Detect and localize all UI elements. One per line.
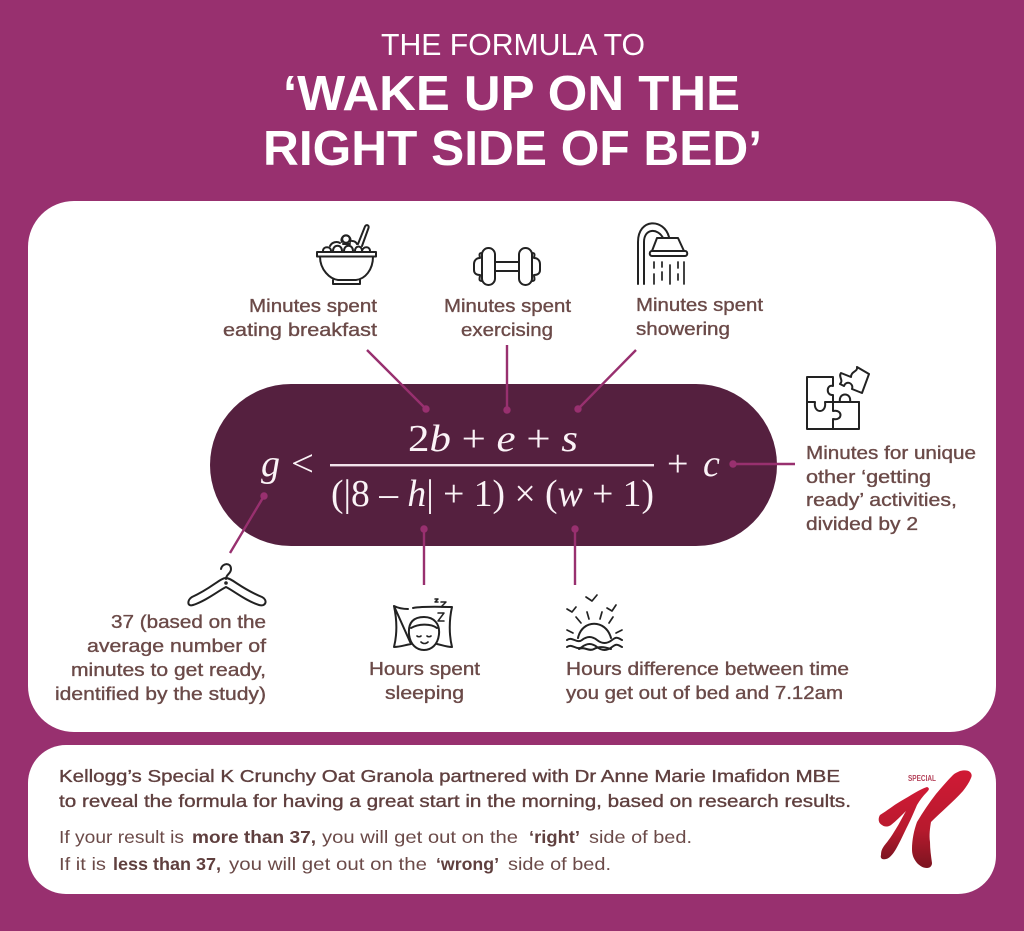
formula equation: c <box>703 443 720 485</box>
result text: side of bed. <box>589 827 692 847</box>
label: sleeping: sleeping <box>385 683 464 703</box>
label: other activities: ready’ activities, <box>806 490 957 510</box>
label: time difference <box>566 659 849 703</box>
label: other activities: Minutes for unique <box>806 443 976 463</box>
logo: Special K <box>879 770 972 868</box>
result text: less than 37, <box>113 854 221 874</box>
label: showering: showering <box>636 319 730 339</box>
panel: formula <box>28 201 996 732</box>
label: showering <box>636 295 763 339</box>
label: other activities: other ‘getting <box>806 467 931 487</box>
label: other activities: divided by 2 <box>806 514 918 534</box>
label: getting ready average: average number of <box>87 636 267 656</box>
label: getting ready average: 37 (based on the <box>111 612 266 632</box>
formula equation: + <box>667 443 688 485</box>
result text: ‘wrong’ <box>436 854 499 874</box>
label: breakfast: eating breakfast <box>223 320 377 340</box>
result text: ‘right’ <box>529 827 580 847</box>
logo: Special K: SPECIAL <box>908 774 936 783</box>
formula equation <box>261 418 720 515</box>
label: getting ready average: identified by the study) <box>55 684 266 704</box>
label: sleeping <box>369 659 480 703</box>
label: time difference: you get out of bed and 7.12am <box>566 683 843 703</box>
intro text: to reveal the formula for having a great start in the morning, based on research results. <box>59 791 851 811</box>
label: getting ready average: minutes to get ready, <box>71 660 266 680</box>
result text: you will get out on the <box>229 854 427 874</box>
result text <box>59 827 692 874</box>
icon: dumbbell <box>474 248 540 285</box>
label: other activities <box>806 443 976 534</box>
result text: more than 37, <box>192 827 316 847</box>
formula equation: 2b + e + s <box>408 418 578 460</box>
icon: sleeping face <box>394 599 452 650</box>
label: exercising: Minutes spent <box>444 296 571 316</box>
icon: cereal bowl <box>317 225 376 284</box>
label: sleeping: Hours spent <box>369 659 480 679</box>
result text: side of bed. <box>508 854 611 874</box>
icon: coat hanger <box>188 564 266 605</box>
formula equation: (|8 – h| + 1) × (w + 1) <box>331 473 654 515</box>
formula equation: g <box>261 443 280 485</box>
title <box>263 27 762 176</box>
label: breakfast: Minutes spent <box>249 296 377 316</box>
formula pill <box>210 384 777 546</box>
formula equation: < <box>291 443 314 485</box>
label: breakfast <box>223 296 377 340</box>
label: exercising <box>444 296 571 340</box>
intro text: Kellogg’s Special K Crunchy Oat Granola partnered with Dr Anne Marie Imafidon MBE <box>59 766 840 786</box>
title: ‘WAKE UP ON THE <box>283 67 740 121</box>
result text: you will get out on the <box>322 827 518 847</box>
result text: If your result is <box>59 827 184 847</box>
label: showering: Minutes spent <box>636 295 763 315</box>
intro text <box>59 766 851 811</box>
connector lines <box>230 345 795 585</box>
icon: sunrise <box>567 595 622 650</box>
icon: shower <box>638 223 687 284</box>
title: THE FORMULA TO <box>381 27 645 62</box>
icon: puzzle <box>807 367 869 429</box>
result text: If it is <box>59 854 106 874</box>
label: exercising: exercising <box>461 320 553 340</box>
label: getting ready average <box>55 612 267 704</box>
title: RIGHT SIDE OF BED’ <box>263 122 762 176</box>
label: time difference: Hours difference between time <box>566 659 849 679</box>
panel: explanation <box>28 745 996 894</box>
